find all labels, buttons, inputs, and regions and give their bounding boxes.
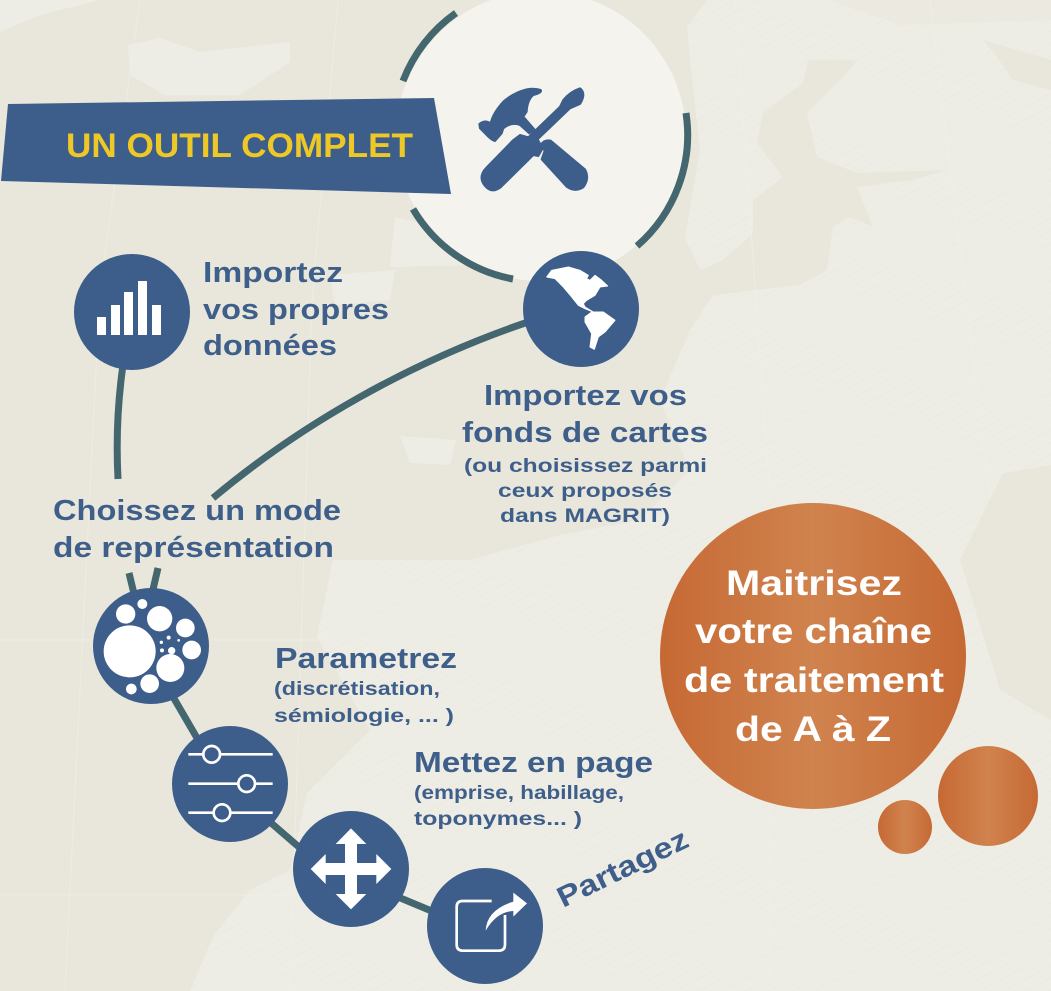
banner: un outil complet: [1, 98, 451, 194]
text: mettez en page: Mettez en page: [414, 747, 653, 779]
bubble: small orange: [878, 800, 932, 854]
icon: proportional bubbles circle: [93, 588, 209, 704]
text: parametrez: sémiologie, ... ): [274, 705, 454, 727]
icon: move arrows circle: [293, 811, 409, 927]
text: choissez un mode de représentation: [53, 495, 341, 564]
text: importez vos propres données: Importez: [203, 257, 343, 289]
bubble: large orange: [938, 746, 1038, 846]
text: importez vos fonds de cartes: [462, 380, 708, 527]
icon: bar chart circle: [74, 254, 190, 370]
text: parametrez: Parametrez: [275, 643, 457, 675]
text: importez vos fonds de cartes: ceux proposés: [498, 480, 672, 502]
text: importez vos fonds de cartes: dans MAGRIT): [500, 505, 670, 527]
callout: maitrisez votre chaine: votre chaîne: [695, 612, 932, 651]
text: mettez en page: (emprise, habillage,: [414, 782, 624, 804]
text: importez vos propres données: vos propres: [203, 294, 389, 326]
text: importez vos fonds de cartes: fonds de cartes: [462, 417, 708, 449]
connector lines: [117, 322, 528, 912]
tools circle: [396, 0, 688, 281]
icon: hammer and screwdriver: [479, 88, 587, 190]
text: importez vos fonds de cartes: (ou choisissez parmi: [464, 455, 707, 477]
text: importez vos propres données: [203, 257, 389, 362]
text: importez vos propres données: données: [203, 330, 337, 362]
callout: maitrisez votre chaine: [660, 503, 966, 809]
callout: maitrisez votre chaine: Maitrisez: [726, 564, 902, 603]
icon: globe circle: [523, 251, 639, 367]
text: choissez un mode de représentation: Choissez un mode: [53, 495, 341, 527]
text: parametrez: [274, 643, 457, 727]
icon: share circle: [427, 868, 543, 984]
banner title: UN OUTIL COMPLET: [66, 127, 413, 165]
text: choissez un mode de représentation: de représentation: [53, 532, 334, 564]
text: parametrez: (discrétisation,: [274, 678, 440, 700]
icon: sliders circle: [172, 726, 288, 842]
text: mettez en page: [414, 747, 653, 830]
callout: maitrisez votre chaine: de traitement: [684, 661, 944, 700]
callout: maitrisez votre chaine: de A à Z: [735, 710, 891, 749]
text: importez vos fonds de cartes: Importez vos: [484, 380, 687, 412]
text: partagez: Partagez: [552, 823, 694, 914]
text: mettez en page: toponymes... ): [414, 808, 582, 830]
